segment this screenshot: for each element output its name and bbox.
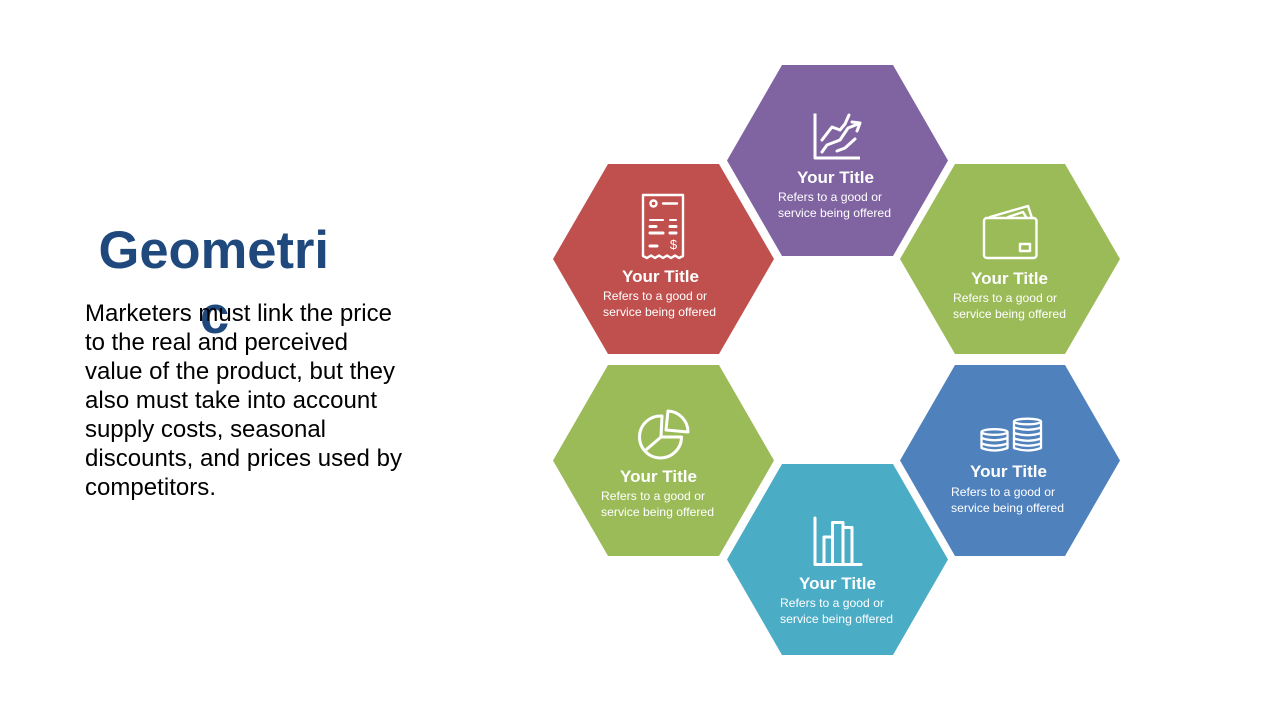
icon: bar chart bbox=[815, 518, 861, 564]
text block: green description top right: Refers to a good or bbox=[953, 291, 1057, 305]
panel: green hexagon top right bbox=[900, 164, 1120, 354]
heading: green title top right: Your Title bbox=[971, 269, 1048, 288]
text block: pricing description bbox=[85, 300, 402, 501]
text block: green description left bbox=[601, 489, 714, 519]
text block: teal description bbox=[780, 596, 893, 626]
panel: blue hexagon bbox=[900, 365, 1120, 556]
panel: purple hexagon bbox=[727, 65, 948, 256]
text block: pricing description: discounts, and prices used by bbox=[85, 445, 402, 472]
text block: green description left: Refers to a good or bbox=[601, 489, 705, 503]
text block: red description: Refers to a good or bbox=[603, 289, 707, 303]
text block: pricing description: supply costs, seasonal bbox=[85, 416, 326, 443]
text block: red description bbox=[603, 289, 716, 319]
heading: Geometric bbox=[98, 221, 329, 345]
text block: red description: service being offered bbox=[603, 305, 716, 319]
text block: blue description: Refers to a good or bbox=[951, 485, 1055, 499]
text block: blue description: service being offered bbox=[951, 501, 1064, 515]
text block: purple description: Refers to a good or bbox=[778, 190, 882, 204]
text block: green description top right: service being offered bbox=[953, 307, 1066, 321]
icon: receipt bbox=[643, 195, 683, 258]
icon: dollar sign: $ bbox=[670, 237, 678, 252]
text block: teal description: Refers to a good or bbox=[780, 596, 884, 610]
text block: blue description bbox=[951, 485, 1064, 515]
icon: pie chart bbox=[640, 411, 688, 458]
panel: teal hexagon bbox=[727, 464, 948, 655]
panel: red hexagon bbox=[553, 164, 774, 354]
text block: purple description bbox=[778, 190, 891, 220]
icon: line chart bbox=[815, 114, 860, 158]
heading: Geometric: c bbox=[200, 286, 229, 345]
heading: teal title: Your Title bbox=[799, 574, 876, 593]
heading: Geometric: Geometri bbox=[98, 221, 329, 280]
panel: green hexagon left bbox=[553, 365, 774, 556]
text block: pricing description: to the real and perceived bbox=[85, 329, 348, 356]
text block: teal description: service being offered bbox=[780, 612, 893, 626]
heading: red title: Your Title bbox=[622, 267, 699, 286]
text block: green description left: service being offered bbox=[601, 505, 714, 519]
text block: green description top right bbox=[953, 291, 1066, 321]
text block: pricing description: competitors. bbox=[85, 474, 216, 501]
heading: blue title: Your Title bbox=[970, 462, 1047, 481]
text block: pricing description: Marketers must link the price bbox=[85, 300, 392, 327]
text block: purple description: service being offered bbox=[778, 206, 891, 220]
text block: pricing description: also must take into account bbox=[85, 387, 377, 414]
icon: coin stacks bbox=[982, 419, 1041, 450]
heading: green title left: Your Title bbox=[620, 467, 697, 486]
icon: wallet bbox=[984, 206, 1036, 258]
heading: purple title: Your Title bbox=[797, 168, 874, 187]
text block: pricing description: value of the product, but they bbox=[85, 358, 395, 385]
